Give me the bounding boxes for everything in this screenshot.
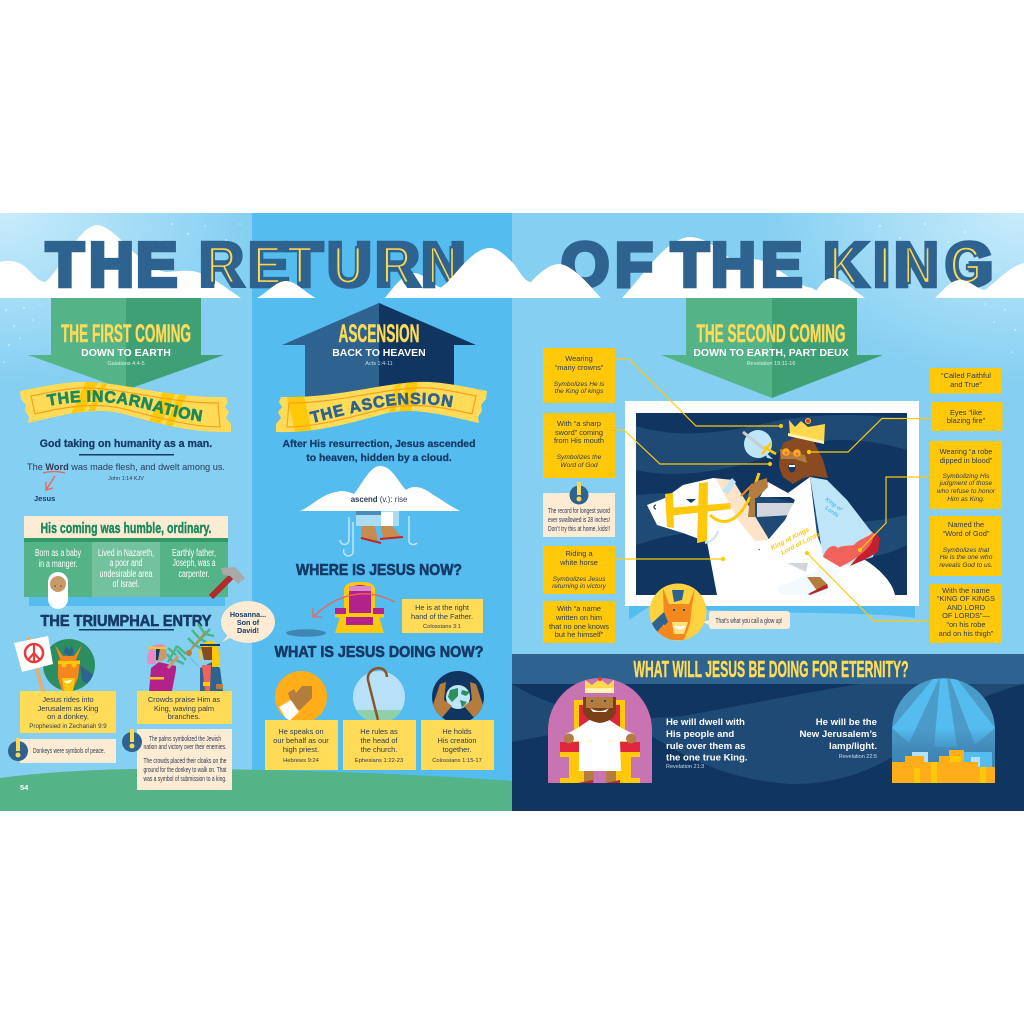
label: many crowns: “many crowns” xyxy=(555,363,604,372)
panel: eternity background xyxy=(512,654,1024,811)
box: he speaks on our behalf xyxy=(265,720,338,770)
label: king of kings: “on his robe xyxy=(946,620,986,629)
text: after His resurrection: After His resurrection, Jesus ascended xyxy=(283,439,475,450)
label: sharp sword: from His mouth xyxy=(554,436,604,445)
illustration: Jesus on white horse xyxy=(625,401,919,620)
box: he rules as head of the church: Ephesians 1:22-23 xyxy=(355,758,403,764)
icon: king on throne xyxy=(548,677,652,783)
title: The Return of the King: OF xyxy=(561,231,653,300)
callout: sword swallowed: ever swallowed is 28 inches! xyxy=(548,515,610,524)
label: king of kings xyxy=(930,584,1002,643)
callout: donkeys symbols of peace xyxy=(8,738,116,763)
box: Jesus rides into Jerusalem: Prophesied in Zechariah 9:9 xyxy=(29,723,107,730)
label: name written on him: but he himself” xyxy=(555,630,604,639)
icon: donkey with peace sign xyxy=(14,636,95,691)
label: name written on him: written on him xyxy=(555,613,602,622)
panel: humble coming: of Israel. xyxy=(112,579,140,590)
callout: palms symbolized: nation and victory over their enemies. xyxy=(144,742,226,751)
speech bubble: hosanna: Son of xyxy=(237,618,260,627)
text: He will dwell: His people and xyxy=(666,729,734,740)
arrow: the first coming: THE FIRST COMING xyxy=(61,320,191,348)
arrow: the second coming: DOWN TO EARTH, PART DEUX xyxy=(693,347,849,359)
text: New Jerusalem light xyxy=(799,717,877,760)
box: right hand of the Father xyxy=(402,599,483,633)
text: New Jerusalem light: Revelation 22:5 xyxy=(839,754,877,760)
label: many crowns: Wearing xyxy=(565,354,593,363)
banner: the incarnation xyxy=(20,382,231,432)
clouds in front of the title xyxy=(257,248,1024,298)
title: The Return of the King: THE xyxy=(671,231,802,300)
title: The Return of the King: KING xyxy=(830,236,982,294)
box: he rules as head of the church: the head of xyxy=(360,736,398,745)
callout: palms symbolized xyxy=(122,729,232,790)
box: he rules as head of the church xyxy=(343,720,416,770)
box: Jesus rides into Jerusalem: Jesus rides into xyxy=(42,695,94,704)
label: king of kings: “KING OF KINGS xyxy=(937,594,995,603)
speech bubble: hosanna: Hosanna... xyxy=(230,610,266,619)
label: blazing fire xyxy=(931,402,1002,431)
label: robe dipped in blood: Wearing “a robe xyxy=(940,447,992,456)
label: robe dipped in blood: dipped in blood” xyxy=(940,456,993,465)
label: name written on him xyxy=(543,601,615,643)
callout: donkeys symbols of peace: Donkeys were symbols of peace. xyxy=(33,746,105,755)
box: he speaks on our behalf: Hebrews 9:24 xyxy=(283,758,320,764)
box: right hand of the Father: Colossians 3:1 xyxy=(423,624,461,630)
text: He will dwell xyxy=(666,717,748,770)
label: white horse: returning in victory xyxy=(552,583,607,590)
icon: baby in a manger xyxy=(48,572,68,609)
box: right hand of the Father: He is at the right xyxy=(415,603,469,612)
text: incarnation definition xyxy=(27,438,225,482)
icon: praying hand xyxy=(275,671,327,723)
title: The Return of the King: THE xyxy=(46,231,177,300)
icon: red arrow to Jesus xyxy=(43,472,65,490)
icon: hammer xyxy=(211,567,245,597)
box: Jesus rides into Jerusalem xyxy=(20,691,116,733)
label: word of God: He is the one who xyxy=(940,554,993,561)
label: many crowns: the King of kings xyxy=(555,388,604,395)
box: he holds creation together: together. xyxy=(443,745,471,754)
label: name written on him: With “a name xyxy=(557,604,601,613)
text: incarnation definition: God taking on humanity as a man. xyxy=(40,438,212,450)
banner: the incarnation: THE INCARNATION xyxy=(46,390,202,422)
label: sharp sword: With “a sharp xyxy=(557,419,601,428)
label: sharp sword xyxy=(543,413,615,478)
banner: the ascension: THE ASCENSION xyxy=(309,392,454,422)
callout lines xyxy=(615,359,930,621)
speckle texture xyxy=(3,223,1016,363)
background: spread panels xyxy=(0,213,1024,811)
label: sharp sword: Word of God xyxy=(560,462,598,469)
box: crowds praise Him xyxy=(137,691,232,724)
icon: shepherd crook xyxy=(353,668,405,723)
label: white horse: Symbolizes Jesus xyxy=(553,576,606,583)
page number: 54 xyxy=(20,783,29,792)
label: white horse: white horse xyxy=(559,558,598,567)
panel: humble coming: a poor and xyxy=(110,558,142,569)
label: faithful and true xyxy=(930,368,1002,394)
label: many crowns xyxy=(543,348,615,403)
box: he speaks on our behalf: He speaks on xyxy=(278,727,324,736)
box: he holds creation together: He holds xyxy=(442,727,472,736)
speech bubble: hosanna xyxy=(221,601,275,643)
box: right hand of the Father: hand of the Father. xyxy=(411,612,473,621)
panel: humble coming: carpenter. xyxy=(178,569,210,580)
callout: palms symbolized: The palms symbolized the Jewish xyxy=(149,734,221,743)
label: robe dipped in blood xyxy=(930,441,1002,509)
arrow: the first coming: Galatians 4:4-5 xyxy=(107,361,145,367)
panel: humble coming: undesirable area xyxy=(100,569,153,580)
speech: glow up: That’s what you call a glow up! xyxy=(716,616,782,625)
label: king of kings: and on his thigh” xyxy=(939,629,994,638)
heading: the triumphal entry: THE TRIUMPHAL ENTRY xyxy=(40,613,212,630)
panel: humble coming: Lived in Nazareth, xyxy=(98,548,154,559)
label: blazing fire: blazing fire” xyxy=(947,416,986,425)
label: robe dipped in blood: who refuse to honor xyxy=(937,488,996,495)
label: faithful and true: and True” xyxy=(950,380,982,389)
box: crowds praise Him: King, waving palm xyxy=(154,704,214,713)
panel: humble coming: in a manger. xyxy=(38,559,78,570)
label: white horse: Riding a xyxy=(565,549,593,558)
icon: Jesus ascending into cloud: ascend (v.): rise xyxy=(351,495,407,504)
text: He will dwell: Revelation 21:3 xyxy=(666,764,704,770)
title: The Return of the King: RETURN xyxy=(207,236,457,294)
label: faithful and true: “Called Faithful xyxy=(941,371,991,380)
label: king of kings: AND LORD xyxy=(947,603,985,612)
title: The Return of the King: KING xyxy=(823,231,993,300)
label: white horse xyxy=(543,546,615,594)
illustration: Jesus on white horse: King of xyxy=(824,497,844,513)
clouds behind the title xyxy=(0,225,830,298)
panel: humble coming: Born as a baby xyxy=(35,548,81,559)
text: New Jerusalem light: He will be the xyxy=(816,717,877,728)
label: robe dipped in blood: Symbolizing His xyxy=(943,473,990,480)
box: Jesus rides into Jerusalem: Jerusalem as King xyxy=(38,704,98,713)
box: he rules as head of the church: the church. xyxy=(361,745,397,754)
label: blazing fire: Eyes “like xyxy=(950,408,982,417)
panel: humble coming: Earthly father, xyxy=(172,548,216,559)
title: The Return of the King xyxy=(46,231,993,300)
box: crowds praise Him: Crowds praise Him as xyxy=(148,695,220,704)
title: The Return of the King: RETURN xyxy=(199,231,466,300)
label: many crowns: Symbolizes He is xyxy=(554,381,605,388)
text: incarnation definition: The Word was made flesh, and dwelt among us. xyxy=(27,462,225,472)
text: New Jerusalem light: lamp/light. xyxy=(829,741,877,752)
label: word of God: “Word of God” xyxy=(943,529,990,538)
box: Jesus rides into Jerusalem: on a donkey. xyxy=(47,712,89,721)
label: robe dipped in blood: Him as King. xyxy=(947,496,985,503)
label: word of God: Symbolizes that xyxy=(943,547,990,554)
callout: sword swallowed xyxy=(543,482,615,537)
box: he holds creation together xyxy=(421,720,494,770)
label: king of kings: With the name xyxy=(942,586,990,595)
illustration: Jesus on white horse: Lord of Lords xyxy=(780,531,821,557)
callout: palms symbolized: The crowds placed their cloaks on the xyxy=(144,756,226,765)
banner: the ascension xyxy=(276,382,487,432)
panel: humble coming: His coming was humble, ordinary. xyxy=(40,520,212,537)
icon: New Jerusalem city xyxy=(892,678,995,783)
box: he holds creation together: Colossians 1:15-17 xyxy=(432,758,482,764)
icon: throne with arrow xyxy=(286,582,395,637)
box: he speaks on our behalf: high priest. xyxy=(283,745,319,754)
illustration: Jesus on white horse: Lords xyxy=(824,505,840,519)
text: after His resurrection: to heaven, hidden by a cloud. xyxy=(306,453,452,464)
label: name written on him: that no one knows xyxy=(549,622,609,631)
arrow: ascension: Acts 1:4-11 xyxy=(365,361,393,367)
callout: palms symbolized: ground for the donkey to walk on. That xyxy=(144,765,226,774)
arrow: the second coming: THE SECOND COMING xyxy=(696,320,846,348)
callout: palms symbolized: was a symbol of submission to a king. xyxy=(143,774,226,783)
text: He will dwell: rule over them as xyxy=(666,741,745,752)
text: New Jerusalem light: New Jerusalem’s xyxy=(799,729,877,740)
box: crowds praise Him: branches. xyxy=(168,712,200,721)
arrow: the first coming: DOWN TO EARTH xyxy=(81,347,171,359)
icon: Jesus ascending into cloud xyxy=(300,466,460,556)
arrow: the second coming xyxy=(661,298,883,398)
text: He will dwell: He will dwell with xyxy=(666,717,745,728)
label: Jesus: Jesus xyxy=(34,494,55,503)
green hill xyxy=(0,769,512,811)
callout: sword swallowed: Don’t try this at home, kids!! xyxy=(548,524,610,533)
label: sharp sword: sword” coming xyxy=(555,428,603,437)
arrow: ascension: ASCENSION xyxy=(338,320,420,348)
callout: sword swallowed: The record for longest sword xyxy=(548,506,610,515)
box: he holds creation together: His creation xyxy=(437,736,477,745)
label: word of God xyxy=(930,516,1002,576)
arrow: ascension: BACK TO HEAVEN xyxy=(332,347,426,359)
label: word of God: reveals God to us. xyxy=(939,562,993,569)
arrow: ascension xyxy=(282,303,476,400)
label: word of God: Named the xyxy=(948,520,984,529)
panel: humble coming: Joseph, was a xyxy=(172,558,216,569)
arrow: the first coming xyxy=(28,298,224,390)
label: king of kings: OF LORDS”— xyxy=(942,611,990,620)
illustration: Jesus on white horse: King of Kings xyxy=(770,526,811,552)
label: robe dipped in blood: judgment of those xyxy=(939,480,993,487)
heading: what is Jesus doing now: WHAT IS JESUS DOING NOW? xyxy=(274,644,484,661)
label: sharp sword: Symbolizes the xyxy=(557,454,602,461)
speech bubble: hosanna: David! xyxy=(237,626,259,635)
heading: where is Jesus now: WHERE IS JESUS NOW? xyxy=(296,562,462,579)
speech: glow up xyxy=(703,611,790,629)
arrow: the second coming: Revelation 19:11-16 xyxy=(747,361,795,367)
box: he rules as head of the church: He rules as xyxy=(360,727,398,736)
panel: humble coming xyxy=(24,516,228,606)
text: He will dwell: the one true King. xyxy=(666,752,748,764)
icon: donkey with speech xyxy=(650,584,706,640)
box: he speaks on our behalf: our behalf as our xyxy=(273,736,329,745)
text: incarnation definition: John 1:14 KJV xyxy=(108,476,144,482)
icon: hands holding globe xyxy=(432,671,484,723)
icon: crowd waving palm branches xyxy=(147,624,223,691)
